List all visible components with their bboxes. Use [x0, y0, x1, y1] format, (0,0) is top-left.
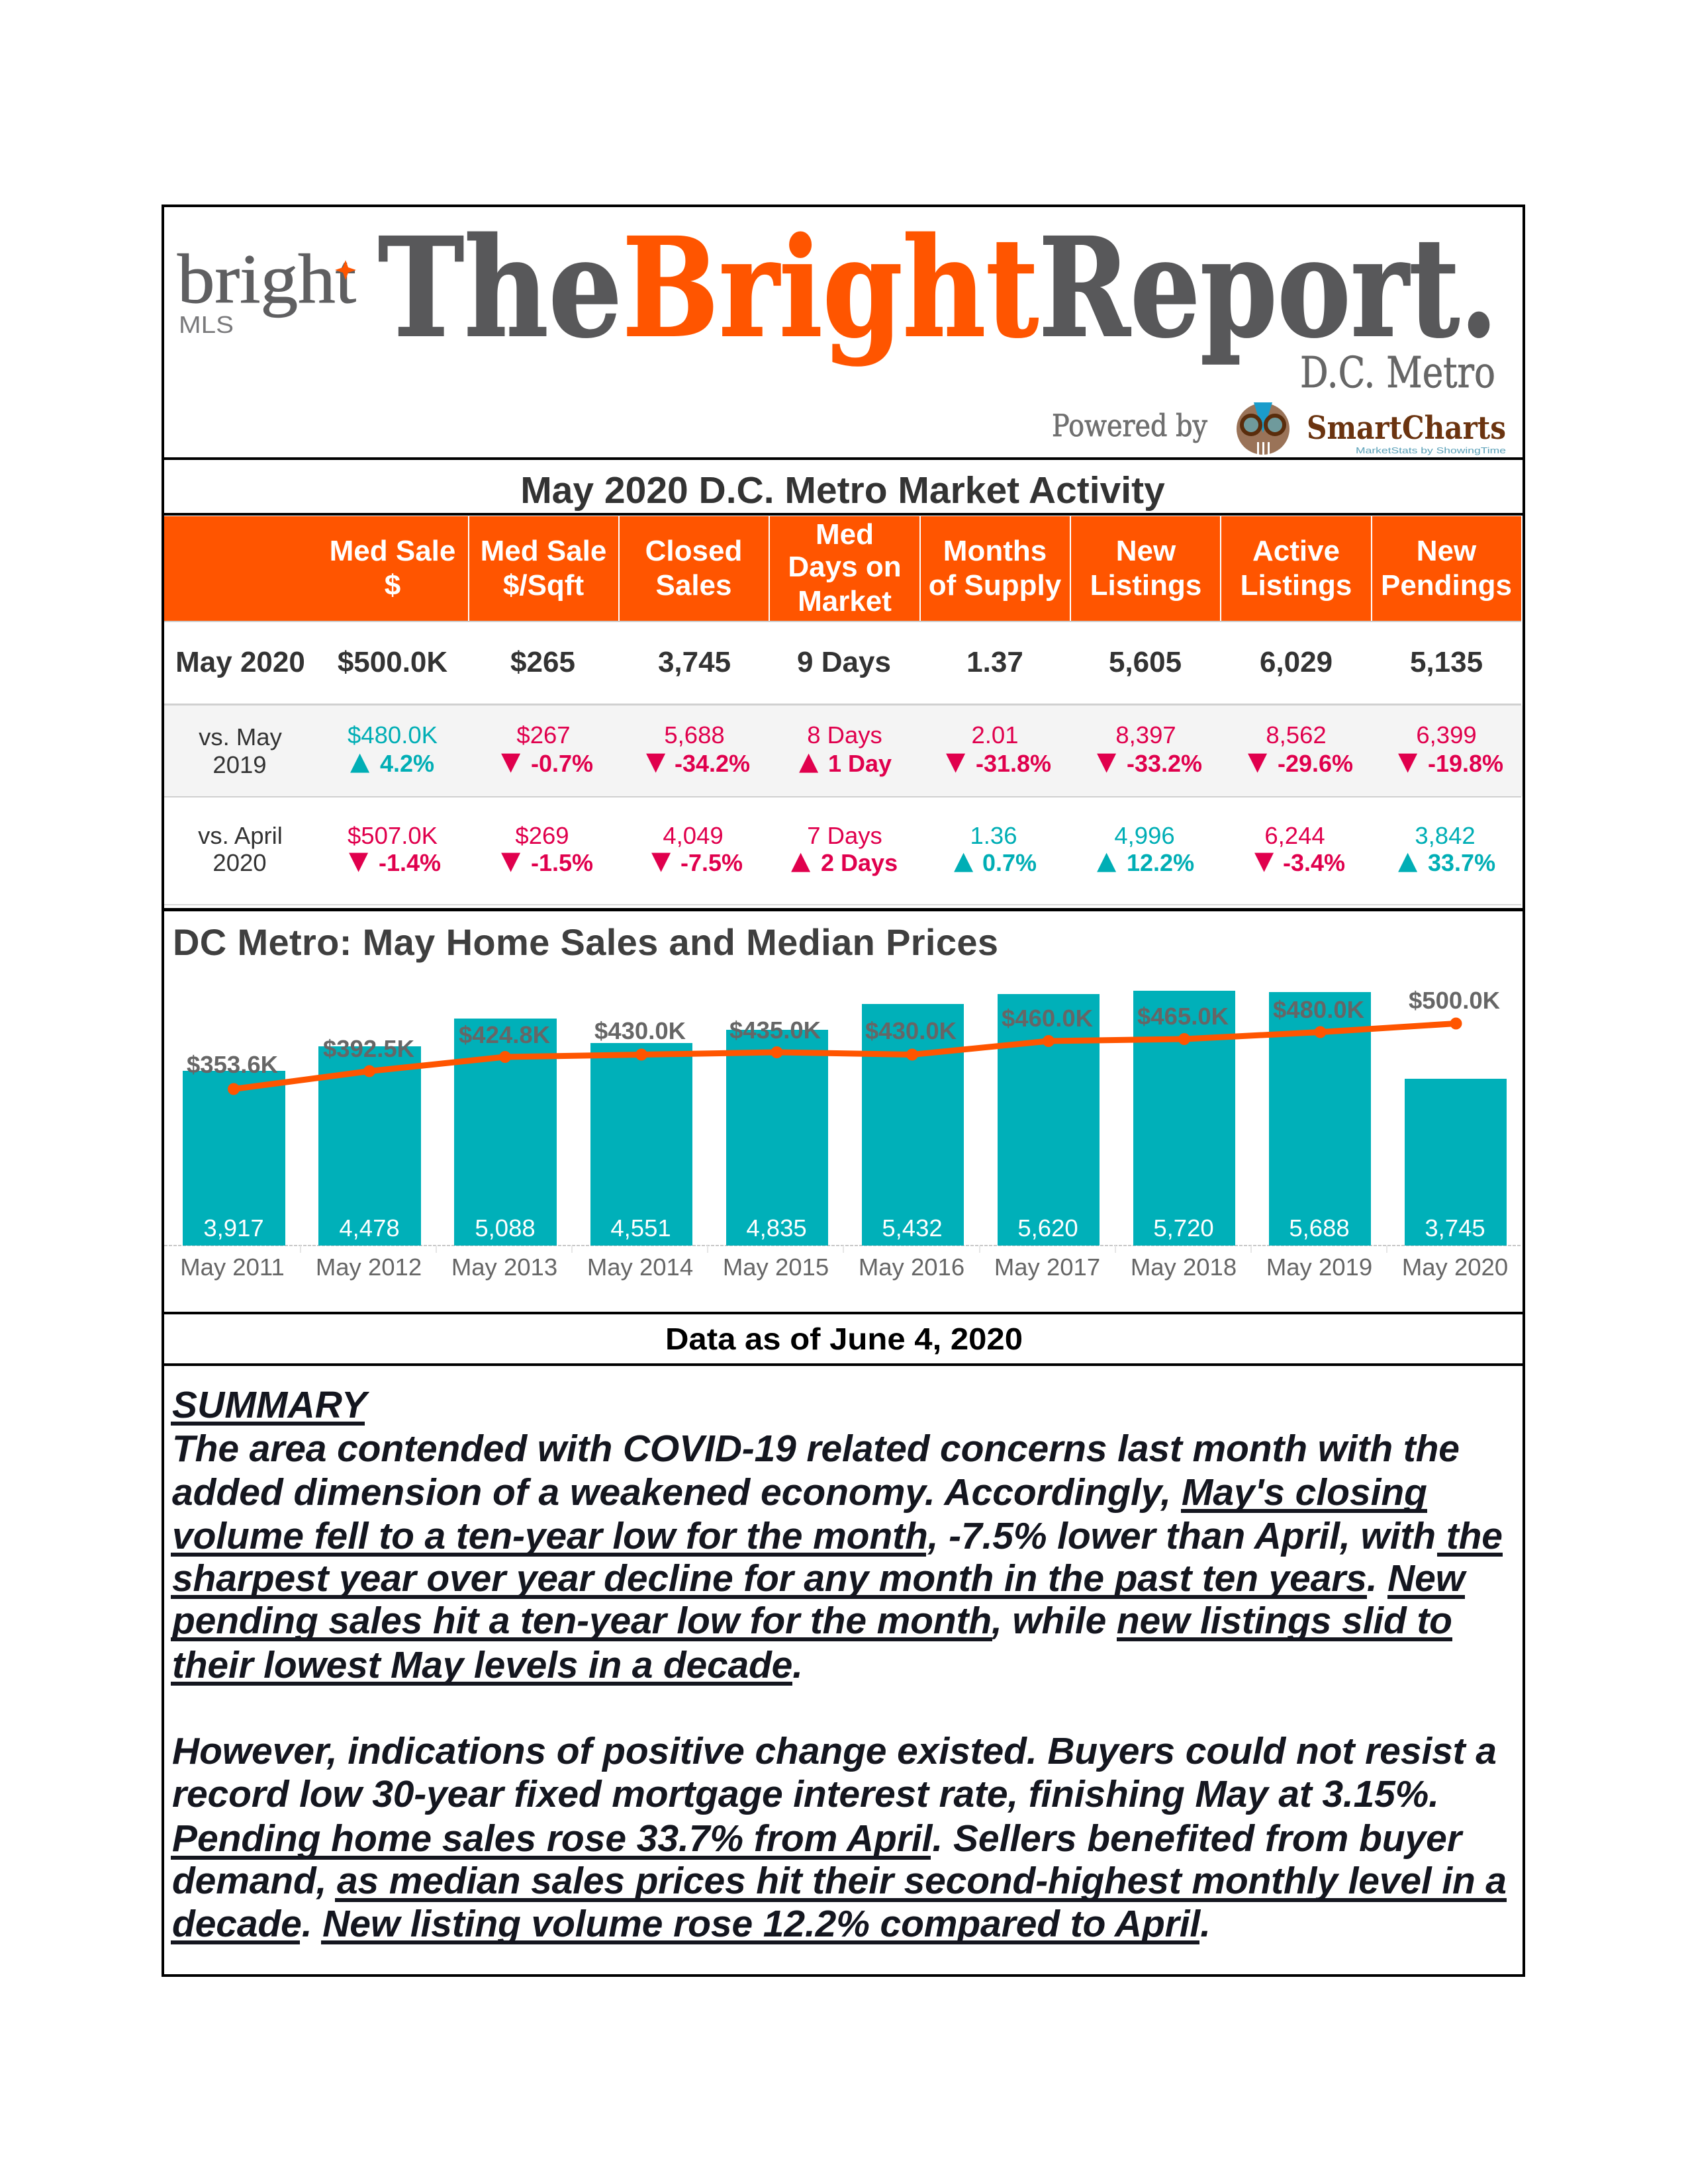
text: SmartCharts: MarketStats by ShowingTime: [1356, 445, 1506, 455]
row: vs. April 2020: ▲: [954, 846, 974, 875]
row: vs. May 2019: 8,562: [1266, 721, 1327, 749]
text: second paragraph: Pending home sales rose 33.7% from April. Sellers benefited from buyer: [172, 1817, 1464, 1860]
row: vs. April 2020: 4,049: [663, 822, 724, 849]
labels: closed sales counts: 4,551: [610, 1214, 671, 1242]
table header row: Closed: [645, 535, 742, 567]
labels: closed sales counts: 5,088: [475, 1214, 536, 1242]
row: vs. May 2019: 2.01: [971, 721, 1019, 749]
labels: median prices: $424.8K: [459, 1021, 551, 1048]
row: vs. April 2020: 33.7%: [1428, 849, 1495, 876]
labels: closed sales counts: 5,720: [1153, 1214, 1214, 1242]
text: first paragraph: pending sales hit a ten-year low for the month, while new listings slid to: [171, 1600, 1452, 1642]
row: vs. May 2019: 8 Days: [807, 721, 882, 749]
labels: x axis years: May 2020: [1402, 1253, 1508, 1281]
row: vs. May 2019: -31.8%: [976, 750, 1051, 777]
table header row: New: [1116, 535, 1176, 567]
table header row: Pendings: [1381, 569, 1512, 602]
row: vs. April 2020: ▼: [1254, 846, 1274, 875]
row: vs. April 2020: 2020: [212, 849, 267, 876]
row: vs. May 2019: 1 Day: [828, 750, 892, 777]
table header row: Months: [943, 535, 1047, 567]
row: vs. May 2019: ▼: [501, 747, 521, 776]
row: vs. April 2020: ▼: [349, 846, 369, 875]
row: vs. May 2019: 6,399: [1416, 721, 1477, 749]
row: May 2020 values: 1.37: [966, 646, 1023, 678]
table header row: Active: [1252, 535, 1340, 567]
labels: closed sales counts: 5,620: [1017, 1214, 1078, 1242]
table header row: Med Sale: [481, 535, 606, 567]
text: second paragraph: record low 30-year fixed mortgage interest rate, finishing May at 3.15%.: [172, 1773, 1439, 1815]
labels: closed sales counts: 5,688: [1289, 1214, 1350, 1242]
table header row: [164, 516, 1521, 621]
panel: summary: [171, 1384, 1507, 1945]
text: first paragraph: [171, 1428, 1503, 1686]
text: data date: Data as of June 4, 2020: [665, 1322, 1023, 1356]
row: vs. April 2020: ▼: [651, 846, 671, 875]
text: first paragraph: volume fell to a ten-year low for the month, -7.5% lower than April, with the: [172, 1515, 1503, 1557]
logo: bright MLS: bright: [177, 240, 356, 318]
axis baseline and ticks: [164, 1246, 1521, 1253]
table header row: Med: [816, 518, 874, 551]
text: powered by: Powered by: [1052, 408, 1207, 443]
labels: median prices: $460.0K: [1002, 1005, 1094, 1032]
labels: median prices: $480.0K: [1273, 996, 1365, 1023]
text: first paragraph: added dimension of a weakened economy. Accordingly, May's closing: [172, 1471, 1427, 1514]
labels: x axis years: May 2013: [451, 1253, 557, 1281]
row: vs. May 2019: ▼: [1097, 747, 1117, 776]
row: vs. May 2019: 8,397: [1115, 721, 1176, 749]
row: vs. April 2020: $507.0K: [348, 822, 438, 849]
labels: x axis years: May 2016: [859, 1253, 964, 1281]
row: vs. May 2019: [164, 704, 1523, 797]
table header row: Listings: [1241, 569, 1352, 602]
labels: x axis years: May 2014: [587, 1253, 693, 1281]
labels: closed sales counts: 3,917: [203, 1214, 264, 1242]
row: May 2020 values: 9 Days: [797, 646, 891, 678]
table header row: $: [385, 569, 400, 602]
row: vs. April 2020: 6,244: [1264, 822, 1325, 849]
labels: x axis years: May 2012: [316, 1253, 422, 1281]
chart: May home sales bars and median price line: [164, 987, 1521, 1281]
row: May 2020 values: 5,135: [1410, 646, 1483, 678]
labels: x axis years: May 2017: [994, 1253, 1100, 1281]
row: vs. April 2020: 12.2%: [1127, 849, 1194, 876]
row: May 2020 values: $500.0K: [338, 646, 447, 678]
logo: bright MLS: MLS: [179, 311, 234, 338]
labels: closed sales counts: 4,478: [339, 1214, 400, 1242]
row: vs. May 2019: -33.2%: [1127, 750, 1202, 777]
row: vs. May 2019: ▲: [350, 747, 370, 776]
row: vs. April 2020: 4,996: [1114, 822, 1175, 849]
labels: closed sales counts: 3,745: [1425, 1214, 1485, 1242]
row: vs. April 2020: ▲: [1097, 846, 1117, 875]
row: May 2020 values: 6,029: [1260, 646, 1333, 678]
table header row: Med Sale: [330, 535, 455, 567]
row: May 2020 values: [164, 621, 1521, 678]
row: vs. May 2019: -29.6%: [1278, 750, 1353, 777]
row: vs. May 2019: -34.2%: [675, 750, 750, 777]
labels: median prices: $353.6K: [187, 1051, 279, 1078]
text: second paragraph: However, indications of positive change existed. Buyers could not resist a: [172, 1730, 1497, 1772]
row: vs. May 2019: $480.0K: [348, 721, 438, 749]
row: vs. April 2020: $269: [515, 822, 569, 849]
labels: median prices: [187, 987, 1501, 1078]
text: SmartCharts: SmartCharts: [1307, 410, 1506, 447]
text: second paragraph: [171, 1730, 1507, 1945]
row: vs. April 2020: ▲: [1398, 846, 1418, 875]
labels: x axis years: [180, 1253, 1508, 1281]
bars: closed sales: [183, 991, 1507, 1246]
table header row: Sales: [656, 569, 731, 602]
row: vs. April 2020: -1.5%: [531, 849, 593, 876]
row: vs. May 2019: ▼: [1398, 747, 1418, 776]
row: May 2020 values: 3,745: [658, 646, 731, 678]
row: vs. April 2020: ▼: [501, 846, 521, 875]
row: vs. April 2020: 7 Days: [807, 822, 882, 849]
panel: market activity table: [164, 516, 1523, 905]
labels: median prices: $435.0K: [729, 1017, 821, 1044]
text: second paragraph: decade. New listing volume rose 12.2% compared to April.: [172, 1903, 1211, 1945]
row: vs. April 2020: -7.5%: [680, 849, 743, 876]
labels: closed sales counts: 4,835: [746, 1214, 807, 1242]
labels: median prices: $430.0K: [594, 1017, 686, 1044]
table header row: of Supply: [929, 569, 1062, 602]
row: vs. April 2020: [164, 822, 1521, 905]
icon: SmartCharts owl: [1237, 402, 1289, 455]
row: vs. April 2020: 1.36: [970, 822, 1017, 849]
title: The Bright Report logotype: [378, 208, 1498, 368]
panel: report header: [177, 208, 1506, 455]
frame: outer border and section dividers: [162, 205, 1525, 1977]
row: vs. April 2020: -3.4%: [1283, 849, 1345, 876]
row: vs. May 2019: 5,688: [664, 721, 725, 749]
row: vs. May 2019: ▼: [646, 747, 666, 776]
table header row: $/Sqft: [503, 569, 584, 602]
title: The Bright Report logotype: Bright: [622, 208, 1039, 368]
row: May 2020 values: $265: [510, 646, 575, 678]
title: The Bright Report logotype: The: [378, 208, 622, 368]
heading: market activity: May 2020 D.C. Metro Market Activity: [520, 469, 1165, 512]
row: vs. May 2019: vs. May: [199, 723, 283, 751]
labels: x axis years: May 2018: [1131, 1253, 1237, 1281]
row: vs. May 2019: -19.8%: [1428, 750, 1503, 777]
title: The Bright Report logotype: Report.: [1039, 208, 1498, 368]
row: vs. May 2019: ▲: [799, 747, 819, 776]
heading: summary: SUMMARY: [172, 1384, 370, 1426]
text: first paragraph: The area contended with COVID-19 related concerns last month with the: [172, 1428, 1460, 1470]
table header row: Days on: [788, 551, 902, 583]
labels: x axis years: May 2015: [723, 1253, 829, 1281]
text: first paragraph: sharpest year over year decline for any month in the past ten years. New: [172, 1557, 1468, 1600]
row: vs. May 2019: ▼: [946, 747, 966, 776]
labels: closed sales counts: [203, 1214, 1485, 1242]
labels: median prices: $465.0K: [1137, 1003, 1229, 1030]
labels: median prices: $500.0K: [1409, 987, 1501, 1014]
heading: chart title: DC Metro: May Home Sales and Median Prices: [173, 921, 998, 963]
row: vs. May 2019: ▼: [1248, 747, 1268, 776]
labels: closed sales counts: 5,432: [882, 1214, 943, 1242]
labels: x axis years: May 2019: [1266, 1253, 1372, 1281]
text: first paragraph: their lowest May levels in a decade.: [172, 1644, 803, 1686]
row: vs. April 2020: -1.4%: [379, 849, 441, 876]
labels: median prices: $392.5K: [323, 1035, 415, 1062]
table header row: Market: [798, 585, 892, 617]
subtitle: D.C. Metro: D.C. Metro: [1300, 348, 1495, 398]
row: vs. May 2019: 4.2%: [380, 750, 434, 777]
row: May 2020 values: 5,605: [1109, 646, 1182, 678]
line: median price: [228, 1018, 1462, 1095]
row: vs. May 2019: $267: [516, 721, 571, 749]
labels: x axis years: May 2011: [180, 1253, 285, 1281]
row: vs. April 2020: 0.7%: [982, 849, 1037, 876]
table header row: New: [1417, 535, 1477, 567]
row: vs. April 2020: 3,842: [1415, 822, 1476, 849]
table header row: Listings: [1090, 569, 1201, 602]
text: second paragraph: demand, as median sales prices hit their second-highest monthly level in a: [172, 1860, 1507, 1902]
row: vs. May 2019: -0.7%: [531, 750, 593, 777]
row: vs. April 2020: ▲: [791, 846, 811, 875]
row: vs. April 2020: 2 Days: [821, 849, 898, 876]
row: vs. April 2020: vs. April: [198, 822, 283, 849]
row: vs. May 2019: 2019: [212, 751, 267, 778]
labels: median prices: $430.0K: [865, 1017, 957, 1044]
row: May 2020 values: May 2020: [175, 646, 305, 678]
